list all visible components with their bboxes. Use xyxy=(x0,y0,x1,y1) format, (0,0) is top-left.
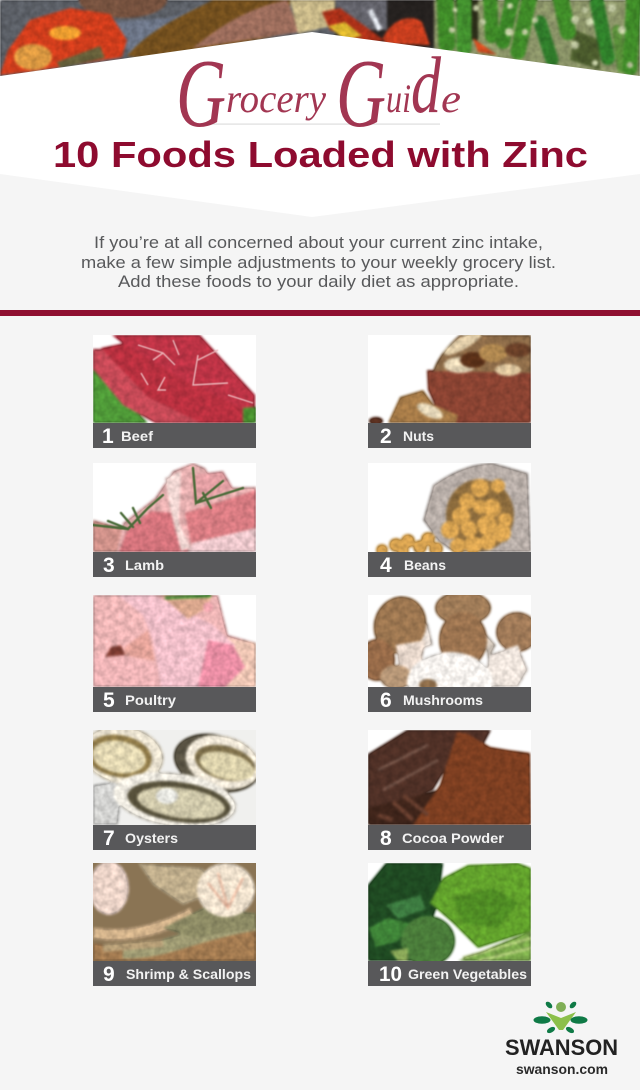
label bar: oysters xyxy=(93,825,256,850)
intro text: Add these foods to your daily diet as appropriate. xyxy=(118,273,519,291)
script heading: d xyxy=(411,42,442,130)
icon: Swanson figure with leaves xyxy=(534,1000,588,1034)
card: poultry xyxy=(93,595,256,712)
card: green vegetables xyxy=(368,863,531,986)
number 3: 3 xyxy=(103,554,115,577)
photo: beef xyxy=(93,335,256,423)
intro text: If you’re at all concerned about your current zinc intake, xyxy=(94,234,543,252)
photo: beans xyxy=(368,463,531,557)
photo: mushrooms xyxy=(368,595,531,687)
white header banner xyxy=(0,32,640,217)
number 1: 1 xyxy=(102,425,114,448)
header food photo xyxy=(0,0,640,80)
card: beans xyxy=(368,463,531,577)
script heading: rocery xyxy=(226,76,326,121)
photo: lamb xyxy=(93,463,256,552)
photo: cocoa powder xyxy=(368,730,531,825)
title rule xyxy=(200,124,440,125)
photo: oysters xyxy=(93,730,256,825)
label bar: beef xyxy=(93,423,256,448)
label bar: nuts xyxy=(368,423,531,448)
label bar: shrimp and scallops xyxy=(93,961,256,986)
number 10: 10 xyxy=(379,963,402,986)
label Lamb: Lamb xyxy=(125,557,164,573)
label bar: cocoa powder xyxy=(368,825,531,850)
label bar: lamb xyxy=(93,552,256,577)
photo: poultry xyxy=(93,595,256,687)
label Nuts: Nuts xyxy=(403,428,434,444)
website: swanson.com xyxy=(516,1062,608,1077)
label bar: mushrooms xyxy=(368,687,531,712)
label bar: green vegetables xyxy=(368,961,531,986)
photo: shrimp and scallops xyxy=(89,861,256,961)
card: lamb xyxy=(93,463,256,577)
script heading: e xyxy=(441,76,461,121)
label Mushrooms: Mushrooms xyxy=(403,692,483,708)
label Oysters: Oysters xyxy=(125,830,178,846)
number 5: 5 xyxy=(103,689,115,712)
script heading xyxy=(176,40,461,148)
script heading: G xyxy=(336,40,386,148)
card: beef xyxy=(93,335,256,448)
photo: nuts xyxy=(368,335,531,423)
label Poultry: Poultry xyxy=(125,692,176,708)
label Cocoa Powder: Cocoa Powder xyxy=(402,830,505,846)
number 6: 6 xyxy=(380,689,392,712)
label Beans: Beans xyxy=(404,557,446,573)
card: mushrooms xyxy=(368,595,531,712)
script heading: G xyxy=(176,40,226,148)
number 4: 4 xyxy=(380,554,392,577)
crimson divider xyxy=(0,310,640,316)
logo: Swanson xyxy=(505,1000,618,1077)
intro text xyxy=(81,234,556,291)
number 7: 7 xyxy=(103,827,115,850)
label Beef: Beef xyxy=(121,428,153,444)
number 2: 2 xyxy=(380,425,392,448)
photo: green vegetables xyxy=(368,863,531,966)
label Shrimp & Scallops: Shrimp & Scallops xyxy=(126,966,251,982)
label Green Vegetables: Green Vegetables xyxy=(408,966,527,982)
card: nuts xyxy=(368,327,531,448)
number 9: 9 xyxy=(103,963,115,986)
card: oysters xyxy=(93,730,256,850)
main title: 10 Foods Loaded with Zinc xyxy=(53,134,588,175)
card: cocoa powder xyxy=(368,730,531,850)
number 8: 8 xyxy=(380,827,392,850)
script heading: ui xyxy=(386,76,411,121)
intro text: make a few simple adjustments to your weekly grocery list. xyxy=(81,254,556,272)
card: shrimp and scallops xyxy=(89,861,256,986)
wordmark: SWANSON xyxy=(505,1035,618,1060)
label bar: beans xyxy=(368,552,531,577)
label bar: poultry xyxy=(93,687,256,712)
